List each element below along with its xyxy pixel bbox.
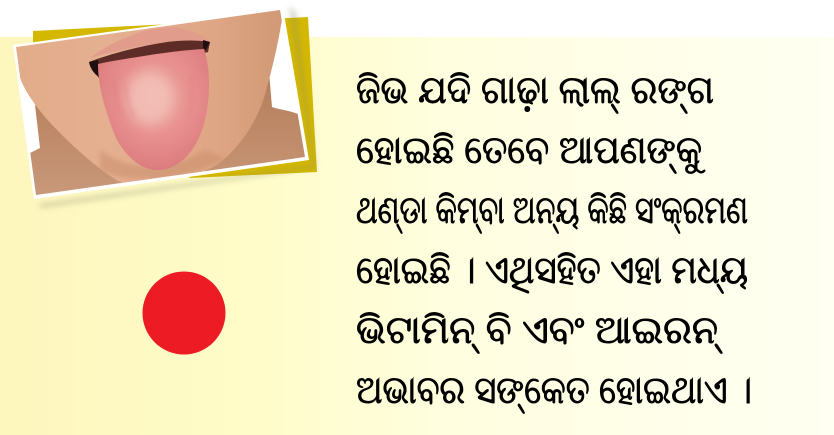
tongue furrows [128,100,134,114]
text line 4: ହୋଇଛି । ଏଥିସହିତ ଏହା ମଧ୍ୟ [356,249,748,294]
chin shading [100,150,225,179]
text line 6: ଅଭାବର ସଙ୍କେତ ହୋଇଥାଏ । [356,369,752,414]
mouth opening [89,40,210,80]
white photo ground [0,0,330,210]
neck and shoulders [30,78,305,195]
text line 2: ହୋଇଛି ତେବେ ଆପଣଙ୍କୁ [356,129,706,175]
red circle [142,272,226,354]
text line 1: ଜିଭ ଯଦି ଗାଢ଼ା ଲାଲ୍ ରଙ୍ଗ [356,69,714,114]
text line 5: ଭିଟାମିନ୍ ବି ଏବଂ ଆଇରନ୍ [356,309,722,354]
body text [356,69,752,414]
yellow backing card [33,17,317,178]
photo shadow [38,6,316,208]
face and chin [14,6,284,183]
mouth corner right [203,40,210,50]
upper lip [90,27,210,58]
photo frame [13,8,309,199]
tongue [98,49,209,170]
photo: tongue sticking out [13,6,318,210]
tongue highlight [126,71,174,125]
mouth corner left [89,60,99,77]
